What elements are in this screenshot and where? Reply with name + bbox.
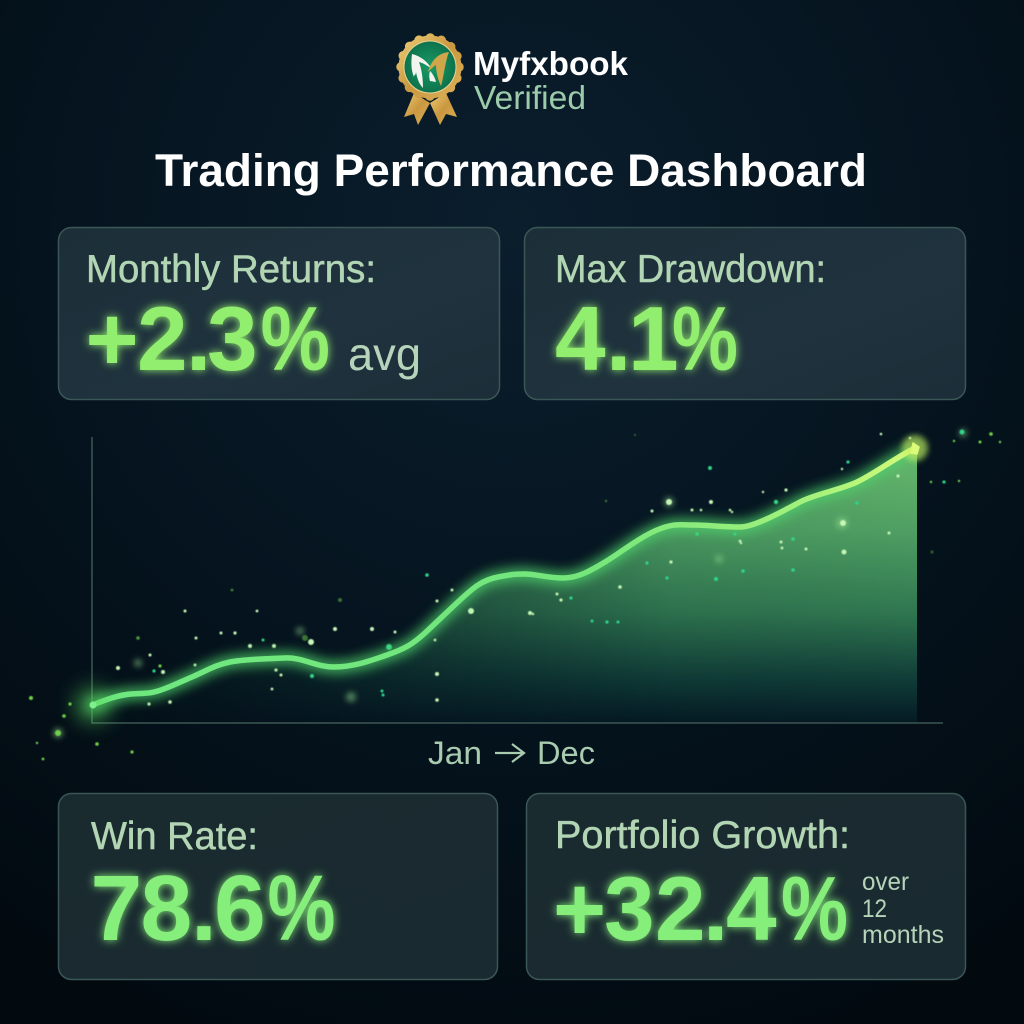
chart area fill xyxy=(248,454,917,722)
label: win rate: Win Rate: xyxy=(91,815,258,858)
axis label xyxy=(428,735,595,771)
value: +2.3%: % xyxy=(260,289,330,390)
label: monthly returns: Monthly Returns: xyxy=(86,248,376,291)
axis label: Jan xyxy=(428,735,482,771)
icon: verified medal badge xyxy=(398,36,462,98)
axis label: Dec xyxy=(537,735,595,771)
start point glow xyxy=(75,687,111,723)
panel: monthly returns xyxy=(58,228,500,400)
value: 4.1%: 4.1 xyxy=(555,289,679,390)
arrow: Jan to Dec xyxy=(495,744,524,762)
label: portfolio growth: Portfolio Growth: xyxy=(555,814,850,857)
end point marker xyxy=(902,435,928,461)
unit: over 12 months: over xyxy=(862,868,909,896)
label: max drawdown: Max Drawdown: xyxy=(555,248,826,291)
unit: over 12 months xyxy=(862,868,944,949)
icon: gold ribbon tails xyxy=(404,93,457,125)
logo wordmark: Myfxbook xyxy=(473,45,629,82)
panel: max drawdown xyxy=(524,228,966,400)
logo subtitle: Verified xyxy=(474,79,586,116)
chart: performance line Jan to Dec xyxy=(29,429,1001,771)
unit: over 12 months: months xyxy=(862,921,944,949)
value: +2.3%: +2.3 xyxy=(86,289,258,390)
chart axes xyxy=(92,437,943,723)
value: 4.1%: % xyxy=(672,289,738,390)
panel: portfolio growth xyxy=(526,794,966,980)
value: +32.4%: % xyxy=(781,859,848,960)
value: 78.6%: % xyxy=(268,856,336,960)
value: +32.4%: +32.4 xyxy=(553,859,777,960)
value: 4.1% xyxy=(555,289,738,390)
particles: glow motes xyxy=(29,429,1001,760)
unit: avg: avg xyxy=(348,328,421,380)
chart line glow xyxy=(93,448,915,705)
panel: win rate xyxy=(58,794,498,980)
value: 78.6%: 78.6 xyxy=(90,856,266,960)
header: Myfxbook Verified logo xyxy=(398,36,629,125)
title: Trading Performance Dashboard xyxy=(155,145,867,196)
unit: over 12 months: 12 xyxy=(862,895,887,923)
chart line xyxy=(93,448,915,705)
